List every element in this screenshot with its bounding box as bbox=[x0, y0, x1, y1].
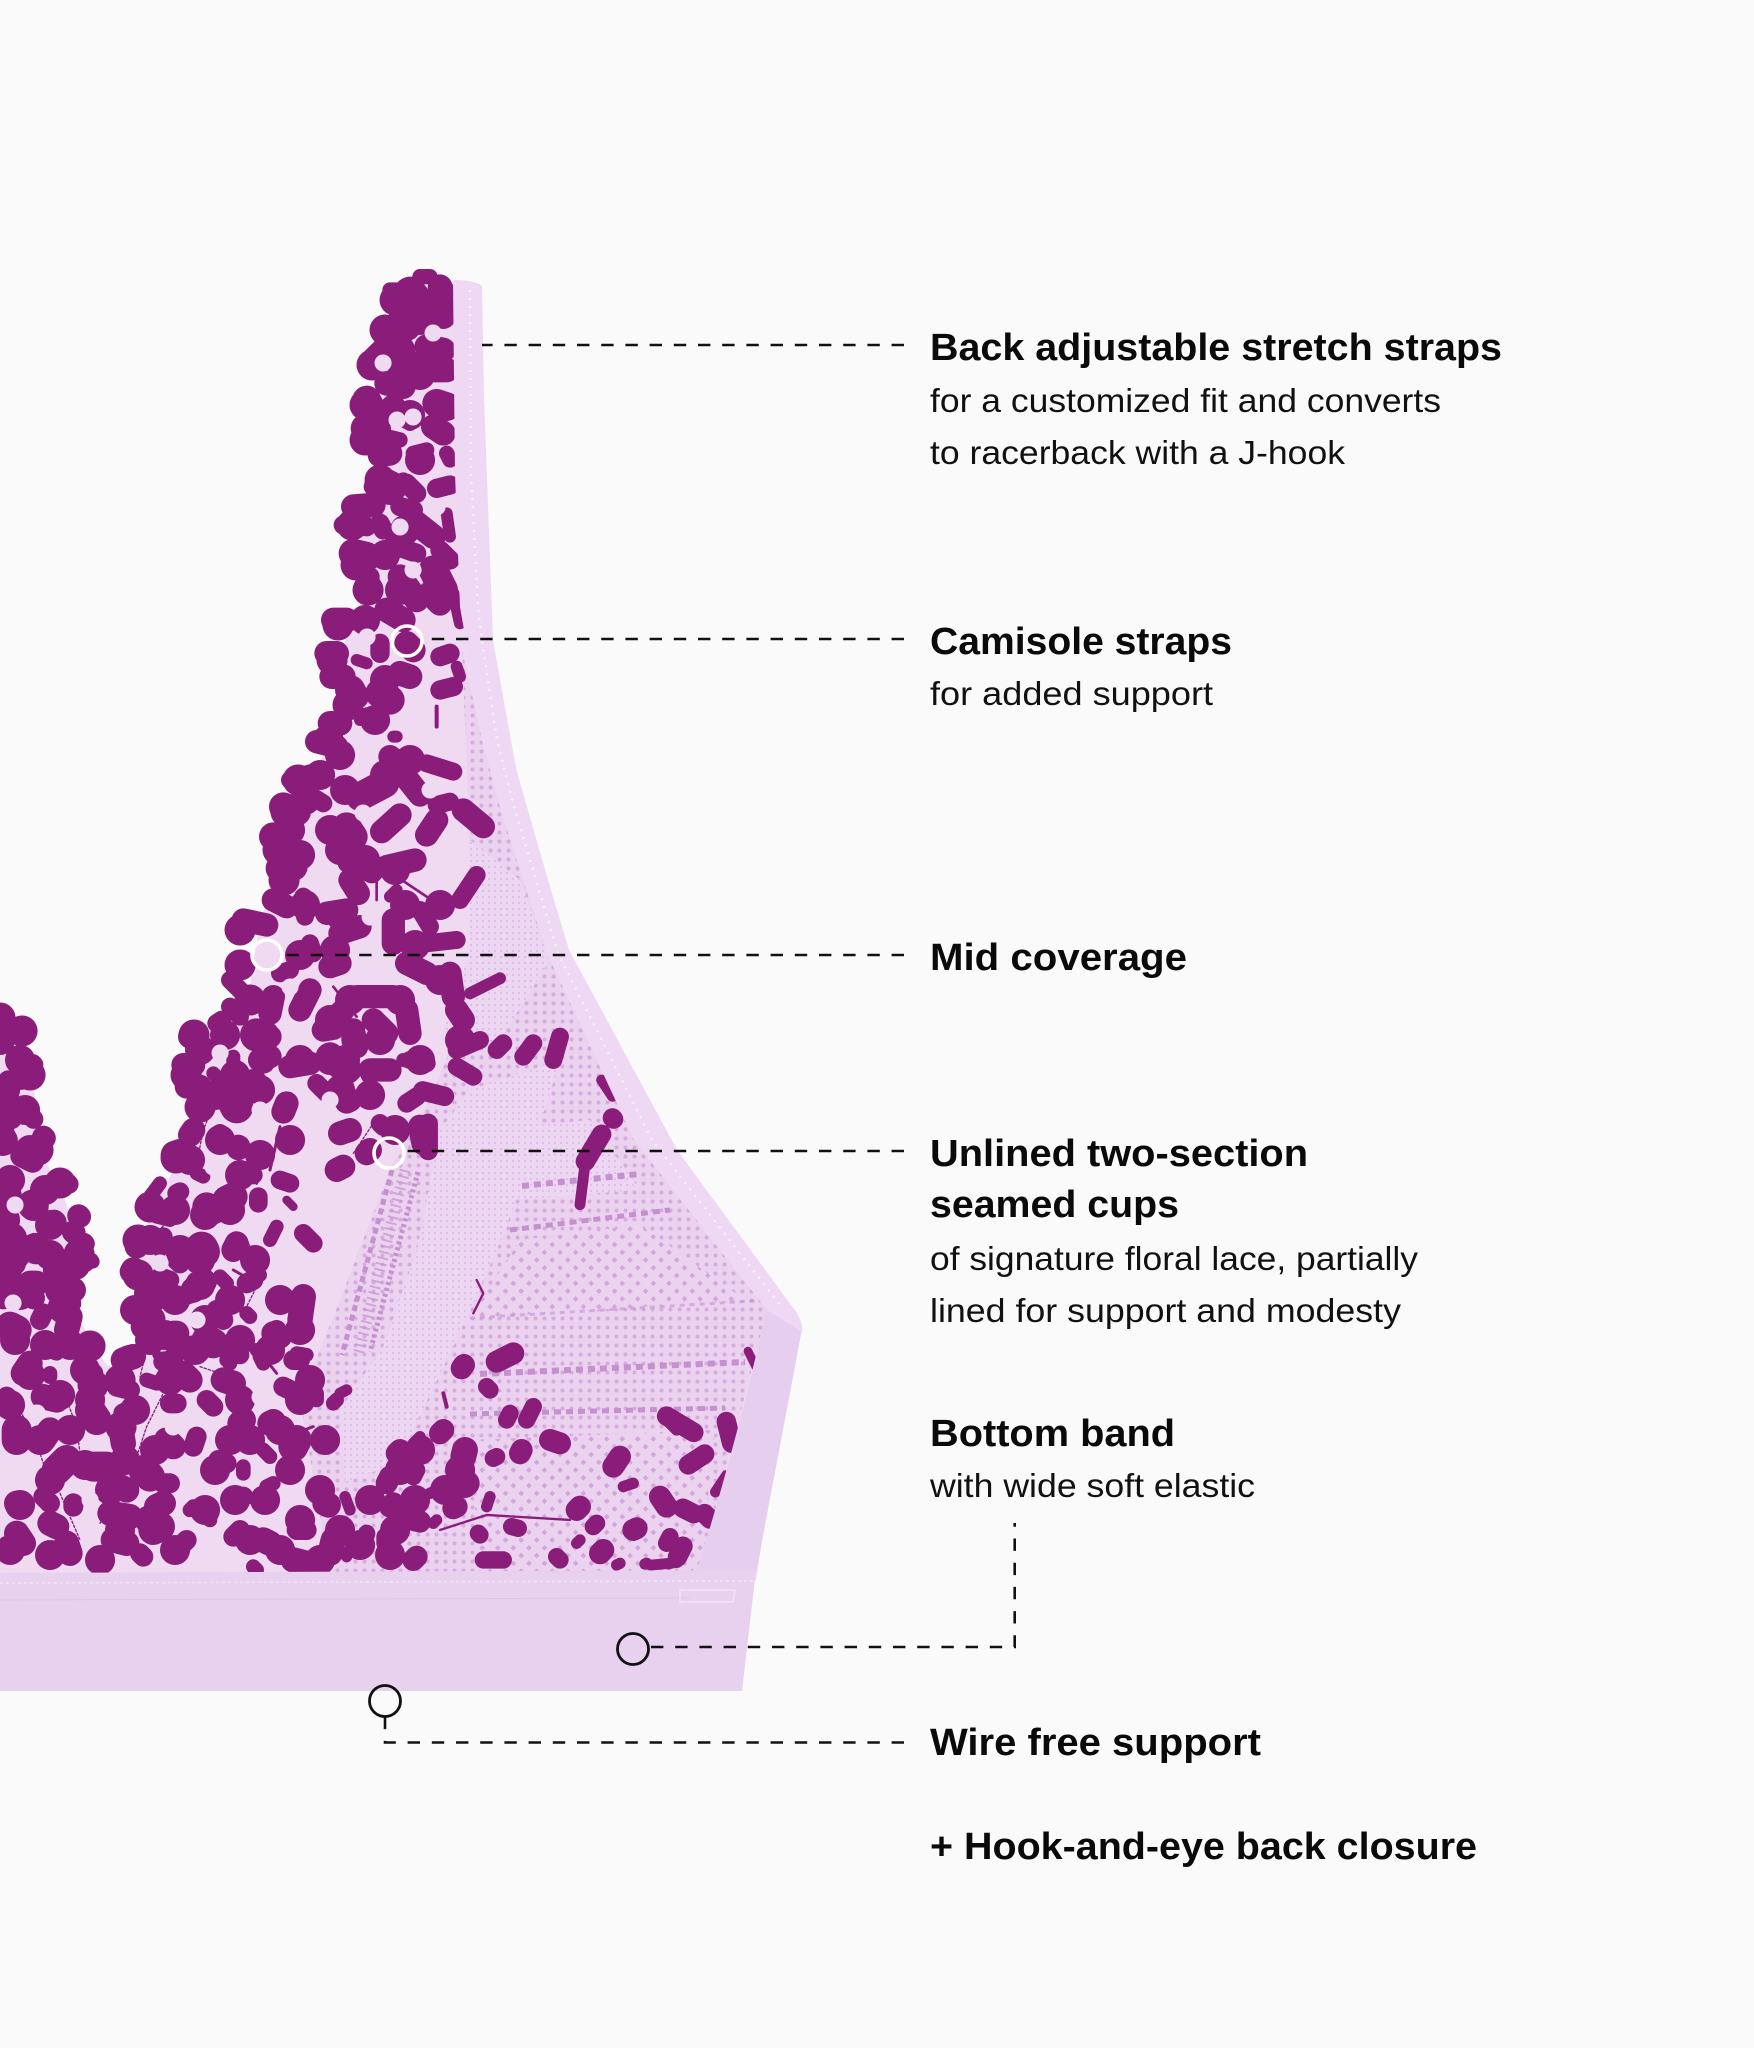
text: bottom band: Bottom band bbox=[930, 1413, 1175, 1455]
binding stitching bbox=[470, 290, 780, 1305]
text: mid coverage: Mid coverage bbox=[930, 937, 1187, 979]
callout: unlined cups marker bbox=[374, 1138, 904, 1168]
callout: camisole straps marker bbox=[392, 626, 904, 656]
text: camisole straps bbox=[930, 621, 1232, 712]
band stitching bbox=[0, 1581, 755, 1602]
lace base fabric bbox=[0, 283, 797, 1580]
callout: bottom band marker bbox=[618, 1523, 1015, 1664]
side power mesh panel bbox=[696, 1308, 802, 1573]
centre front lace bbox=[3, 1247, 337, 1570]
mesh strip detail bbox=[342, 1170, 770, 1414]
text: unlined two-section seamed cups: lined for support and modesty bbox=[930, 1292, 1402, 1329]
binding along strap and neckline bbox=[453, 280, 802, 1332]
text: back adjustable stretch straps: to racerback with a J-hook bbox=[930, 434, 1346, 471]
text: bottom band: with wide soft elastic bbox=[929, 1467, 1255, 1504]
text: unlined two-section seamed cups bbox=[930, 1133, 1419, 1329]
side and upper-right lace, left cup top bbox=[0, 1029, 756, 1565]
lower left lace bbox=[92, 1020, 423, 1357]
text: unlined two-section seamed cups: Unlined two-section bbox=[930, 1133, 1308, 1175]
bottom band bbox=[0, 1570, 756, 1691]
leader: back adjustable straps bbox=[482, 344, 904, 346]
upper strap to cup lace bbox=[320, 483, 460, 737]
text: back adjustable stretch straps: for a customized fit and converts bbox=[930, 382, 1441, 419]
embroidery zigzag threads bbox=[17, 1260, 220, 1540]
net mesh panels bbox=[300, 650, 767, 1573]
text: unlined two-section seamed cups: seamed cups bbox=[930, 1184, 1179, 1226]
text: camisole straps: for added support bbox=[930, 675, 1213, 712]
filler petals bbox=[0, 320, 460, 1560]
pale gaps showing through the lace bbox=[13, 333, 437, 1500]
mid cup lace bbox=[230, 742, 560, 1077]
text: bottom band bbox=[929, 1413, 1255, 1504]
garment: bra illustration bbox=[0, 277, 802, 1691]
text: back adjustable stretch straps bbox=[930, 327, 1502, 471]
text: hook-and-eye back closure: + Hook-and-eye back closure bbox=[930, 1826, 1477, 1868]
text: wire free support: Wire free support bbox=[930, 1722, 1261, 1764]
lower cup lace bbox=[340, 1280, 677, 1565]
text: camisole straps: Camisole straps bbox=[930, 621, 1232, 663]
scalloped outer edge of lace bbox=[0, 300, 395, 1427]
text: back adjustable stretch straps: Back adjustable stretch straps bbox=[930, 327, 1502, 369]
callout: mid coverage marker bbox=[252, 940, 904, 970]
callout: wire free marker bbox=[370, 1686, 904, 1742]
purple floral lace bbox=[0, 277, 756, 1570]
strap lace bbox=[365, 277, 450, 490]
lace ruffle seam bbox=[340, 1060, 560, 1482]
text: unlined two-section seamed cups: of signature floral lace, partially bbox=[930, 1240, 1419, 1277]
